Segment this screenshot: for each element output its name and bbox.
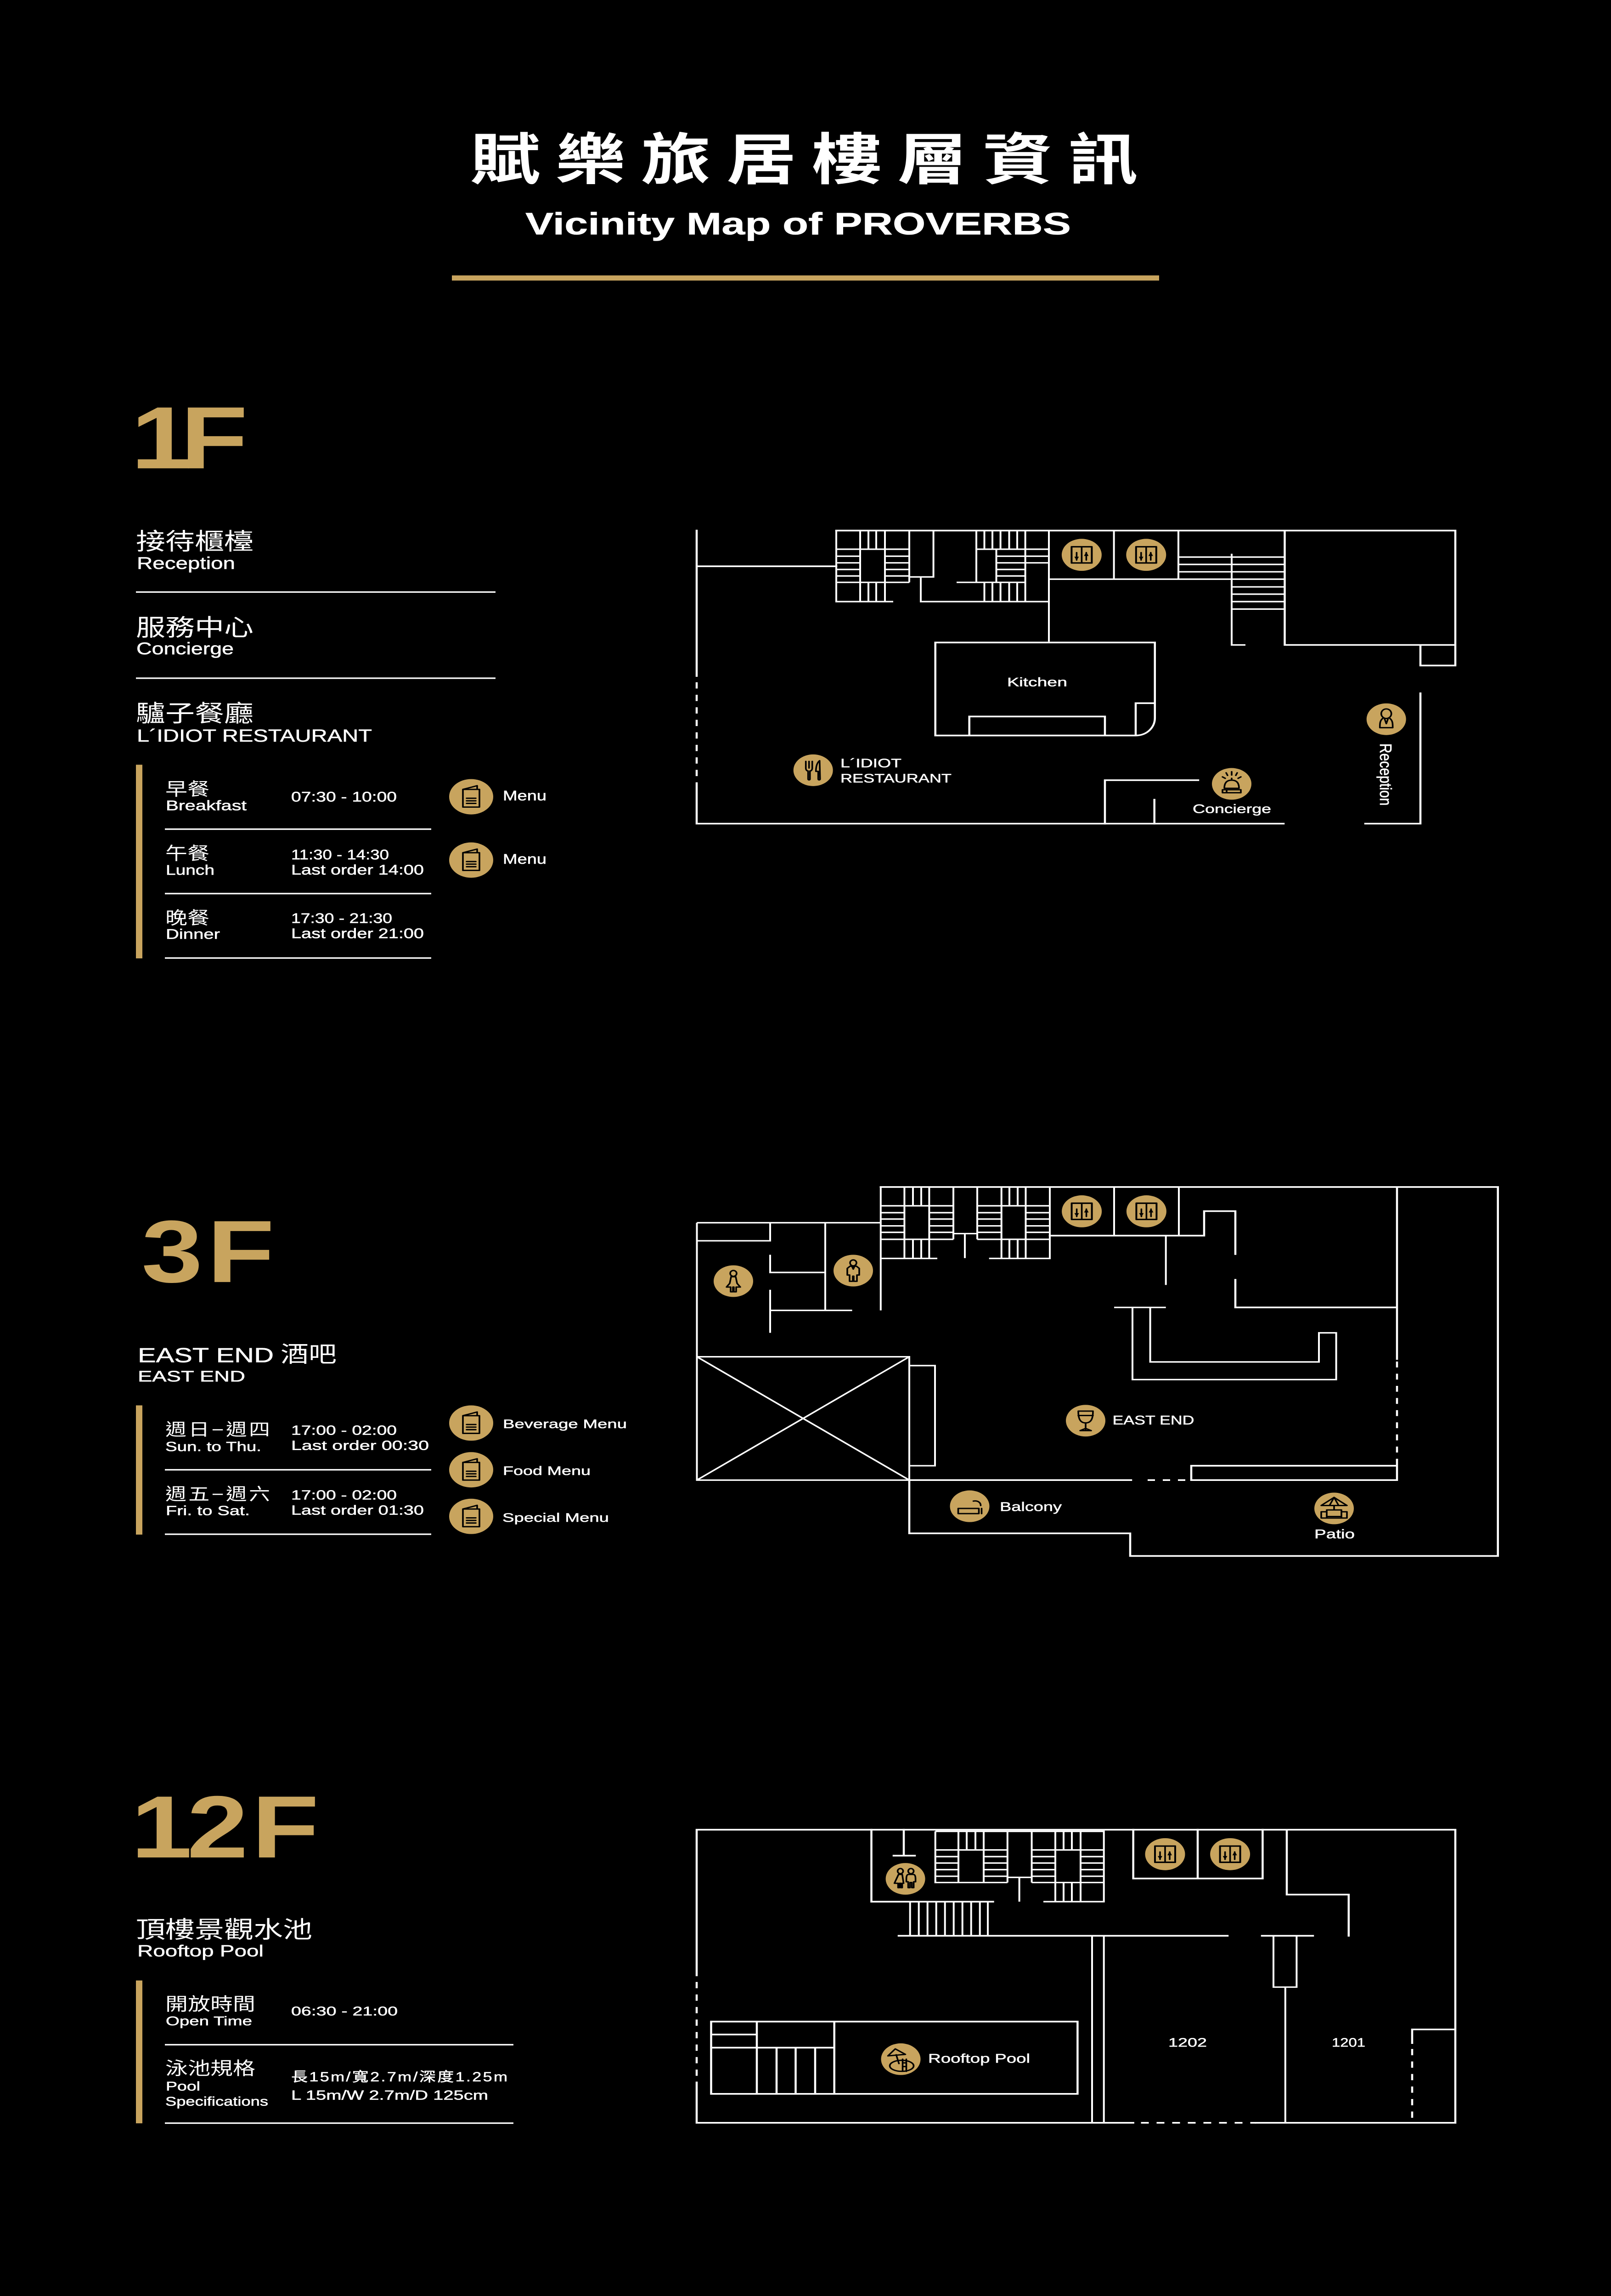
icon: balcony smoking [950,1491,989,1522]
staircase B [957,530,1049,642]
outdoor stairs [910,1902,988,1936]
title underline [452,276,1159,281]
service shaft [1008,1831,1032,1902]
terrace door dashes [1141,2122,1256,2124]
row: pool specifications: Specifications [165,2094,268,2109]
staircase A [836,530,1049,602]
floor plan: 1F [697,530,1455,824]
corridor wall [1114,1236,1166,1307]
text: restaurant: 驢子餐廳 [136,701,253,727]
row: breakfast: 07:30 - 10:00 [291,789,397,805]
row: dinner: 晚餐 [165,909,209,928]
glass wall dashes [696,682,698,777]
label: balcony: Balcony [1000,1499,1062,1514]
icon: women restroom [714,1265,753,1297]
panel: 3F information list [136,1342,627,1535]
label: room 1201: 1201 [1332,2035,1365,2049]
row: lunch [165,844,431,895]
restroom walls [697,1187,881,1480]
staircase B [1032,1831,1104,1902]
panel: 1F information list [136,529,546,959]
row: dinner: Dinner [166,927,220,942]
accent bar [136,765,142,958]
row: breakfast: 早餐 [165,780,209,799]
row: open time: 開放時間 [165,1994,255,2015]
row: lunch: 午餐 [165,844,209,864]
icon: patio seat [1314,1492,1354,1524]
label: kitchen: Kitchen [1007,675,1067,689]
row: sunday to thursday: 週日−週四 [165,1420,270,1439]
icon: pool umbrella [881,2043,920,2075]
icon: elevator [1210,1838,1250,1870]
heading: 1F: 1F [131,388,248,487]
row: breakfast [165,780,431,830]
row: pool specifications: Pool [166,2079,200,2093]
text: rooftop pool [136,1917,312,1960]
label: special menu: Special Menu [502,1510,609,1525]
text: rooftop pool: Rooftop Pool [137,1942,264,1960]
elevator shafts [1114,1187,1179,1236]
label: restaurant [840,756,952,785]
heading: 3F: 3F [141,1202,275,1301]
text: east end [138,1342,337,1384]
service shaft [953,1187,977,1258]
pool outline [711,2021,1077,2094]
row: lunch: Lunch [166,863,214,878]
staircase C [1178,554,1285,645]
row: dinner: Last order 21:00 [291,926,424,941]
label: lunch menu: Menu [503,851,546,867]
text: concierge [136,615,253,658]
row: friday to saturday: 週五−週六 [165,1485,270,1503]
label: patio: Patio [1314,1526,1355,1541]
text: east end: EAST END [138,1344,274,1367]
row: sunday to thursday: 17:00 - 02:00 [291,1423,397,1438]
row: open time [165,1994,513,2045]
atrium void [697,1357,935,1480]
text: east end: 酒吧 [281,1342,337,1367]
label: food menu: Food Menu [503,1463,591,1478]
label: restaurant: L´IDIOT [840,756,901,770]
staircase B [977,1187,1050,1259]
icon: elevator [1062,539,1102,571]
text: concierge: 服務中心 [136,615,253,641]
icon: concierge bell [1212,768,1251,800]
row: dinner [165,909,431,959]
walls [697,1830,1455,2123]
kitchen walls [935,642,1155,736]
row: pool specifications: 長15m/寬2.7m/深度1.25m [291,2069,507,2084]
icon: restaurant [794,754,833,786]
icon: elevator [1127,1195,1166,1227]
text: reception: 接待櫃檯 [136,529,253,555]
row: friday to saturday: Fri. to Sat. [166,1503,250,1518]
walls [697,530,1455,824]
row: pool specifications [165,2059,513,2124]
label: breakfast menu: Menu [503,788,546,804]
text: reception [136,529,253,573]
title [470,129,1138,242]
divider [136,591,496,593]
row: sunday to thursday: Last order 00:30 [291,1438,429,1453]
icon: men restroom [834,1255,873,1286]
row: sunday to thursday: Sun. to Thu. [165,1439,261,1454]
title: Vicinity Map of PROVERBS [525,207,1071,242]
glass doors [1148,1362,1397,1480]
icon: elevator [1062,1195,1102,1227]
icon: elevator [1145,1838,1185,1870]
text: concierge: Concierge [136,639,234,658]
row: pool specifications: 泳池規格 [165,2059,255,2079]
row: breakfast: Breakfast [166,798,247,814]
heading: 12F: 12F [131,1778,319,1877]
text: east end: EAST END [138,1367,245,1384]
accent bar [136,1981,142,2123]
label: rooftop pool: Rooftop Pool [928,2051,1030,2065]
staircase A [935,1831,1008,1883]
icon: beverage menu [449,1405,493,1441]
icon: east end wine glass [1066,1405,1105,1436]
label: concierge: Concierge [1193,802,1271,816]
label: east end: EAST END [1112,1412,1194,1427]
row: dinner: 17:30 - 21:30 [291,911,392,926]
row: lunch: Last order 14:00 [291,862,424,878]
floor plan: 12F [697,1830,1455,2123]
row: friday to saturday [165,1485,431,1535]
floor plan: 3F [697,1187,1498,1556]
row: pool specifications: L 15m/W 2.7m/D 125cm [291,2088,488,2103]
accent bar [136,1405,142,1535]
restroom walls [872,1830,993,1902]
staircase A [881,1187,953,1259]
label: reception: Reception [1376,743,1395,805]
text: restaurant: L´IDIOT RESTAURANT [137,726,372,746]
icon: special menu [449,1499,493,1534]
row: friday to saturday: 17:00 - 02:00 [291,1487,397,1503]
divider [136,677,496,679]
icon: restroom [886,1863,925,1895]
icon: lunch menu [449,843,493,878]
icon: elevator [1126,539,1166,571]
text: restaurant [136,701,372,746]
elevator shafts [1133,1830,1262,1879]
label: beverage menu: Beverage Menu [503,1417,627,1431]
text: reception: Reception [137,553,235,573]
icon: breakfast menu [449,779,493,815]
row: sunday to thursday [165,1420,431,1470]
row: open time: 06:30 - 21:00 [291,2003,398,2018]
concierge desk [1105,780,1198,824]
corridor walls [1092,1936,1296,2123]
bar counter [1132,1307,1336,1379]
elevator shafts [1049,530,1285,579]
row: lunch: 11:30 - 14:30 [291,847,389,862]
label: restaurant: RESTAURANT [840,771,952,785]
text: rooftop pool: 頂樓景觀水池 [136,1917,312,1943]
icon: reception staff [1367,703,1406,735]
walls [881,1187,1498,1556]
dashes [697,1982,1412,2121]
row: open time: Open Time [166,2014,252,2028]
panel: 12F information list [136,1917,513,2124]
row: friday to saturday: Last order 01:30 [291,1503,424,1518]
icon: food menu [449,1452,493,1487]
title: 賦樂旅居樓層資訊 [470,129,1138,191]
label: room 1202: 1202 [1168,2035,1207,2049]
